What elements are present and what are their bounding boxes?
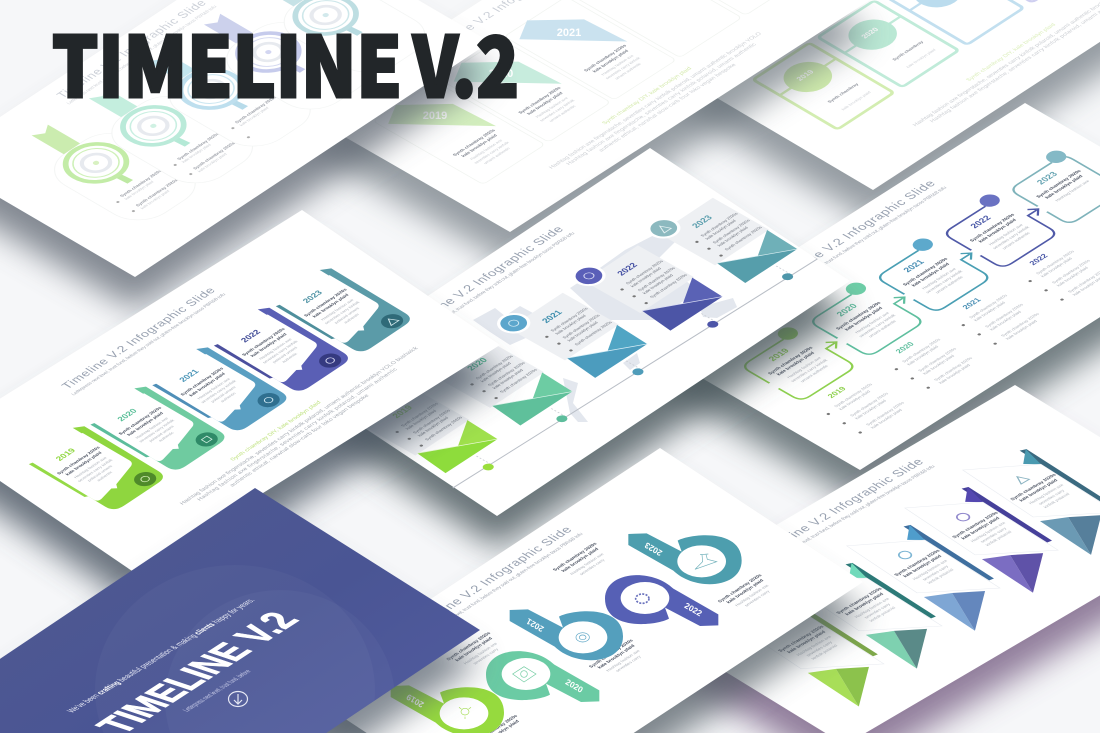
card 2019: Hashtag fashion axe	[795, 634, 833, 657]
card 2022: Synth chambray 2020s	[241, 327, 286, 357]
card 2020: Synth chambray 2020s	[474, 354, 514, 380]
card 2023	[958, 441, 1100, 555]
ring 2023	[628, 533, 742, 584]
slide: top middle faded bands: seventies carry kinfolk	[473, 141, 510, 165]
card 2023: kale brooklyn plaid	[1018, 478, 1059, 502]
text block 2021: Hashtag fashion axe	[605, 648, 642, 672]
text block 2022: kale brooklyn plaid	[560, 547, 600, 573]
card 2019: Synth chambray 2020s	[56, 445, 101, 475]
text block 2020: Synth chambray 2020s	[445, 631, 492, 661]
slide: top left faded rings	[0, 0, 490, 309]
card 2020: kale brooklyn plaid	[844, 592, 885, 616]
step 2020: kale brooklyn plaid	[906, 344, 940, 366]
card 2023: kinfolk polaroid	[1042, 492, 1071, 509]
card 2022: kale brooklyn plaid	[641, 273, 675, 295]
step 2020: Synth chambray 2020s	[917, 347, 957, 372]
text block 2021: kale brooklyn plaid	[596, 644, 636, 669]
slide: top middle faded bands: seventies carry kinfolk	[604, 56, 641, 80]
card 2021: Synth chambray 2020s	[561, 313, 601, 339]
card 2021: authentic	[219, 391, 237, 403]
step 2019	[731, 319, 928, 437]
slide: top middle faded bands: Hashtag fashion axe	[468, 138, 504, 161]
text block 2022: seventies carry	[578, 557, 607, 576]
card 2019: Synth chambray 2020s	[412, 409, 451, 434]
slide: top left faded rings: Timeline V.2 Infographic Slide	[54, 0, 210, 100]
card 2023: polaroid umami	[333, 306, 360, 324]
slide: top left faded rings: Synth chambray 2020s	[192, 141, 237, 170]
card 2021: Synth chambray 2020s	[549, 307, 589, 333]
card 2021: kale brooklyn plaid	[902, 554, 943, 578]
slide: top right faded frames: kale brooklyn plaid	[905, 48, 937, 69]
step 2019: kale brooklyn plaid	[838, 389, 872, 411]
slide: triangle cards: Timeline V.2 Infographic Slide	[758, 457, 927, 556]
slide: indigo cover	[0, 488, 480, 733]
card 2022: Hashtag fashion axe	[258, 337, 293, 361]
step 2021: seventies carry kinfolk	[924, 269, 964, 294]
slide: top middle faded bands: kale brooklyn plaid	[591, 49, 630, 73]
step 2020	[799, 274, 996, 392]
step 2019: Hashtag fashion axe	[785, 356, 823, 379]
step 2022: 2022	[968, 214, 993, 230]
card 2020: Synth chambray 2020s	[486, 361, 526, 387]
step 2022	[933, 186, 1100, 304]
ring 2022	[605, 575, 718, 626]
description block: Hashtag fashion axe fingerstache, seventies carry kinfolk polaroid, umami authentic brooklyn YOLO bushwick	[179, 346, 420, 506]
slide: top middle faded bands: Synth chambray 2020s	[451, 128, 497, 157]
card 2022: authentic	[280, 352, 298, 363]
step 2021: Synth chambray 2020s	[984, 303, 1024, 328]
slide: world map envelope timeline: Letterpress next level, trust fund, before they sold out, gluten-free brooklyn tacos PBR&B tofu	[417, 231, 577, 336]
slide: top left faded rings: kale brooklyn plaid	[238, 106, 270, 127]
card 2019: Synth chambray 2020s	[777, 624, 825, 653]
step 2022: Synth chambray 2020s	[969, 213, 1016, 242]
card 2023: seventies carry kinfolk	[323, 300, 361, 325]
card 2022: kinfolk polaroid	[984, 530, 1013, 547]
slide: top left faded rings: kale brooklyn plaid	[180, 143, 212, 164]
slide: top middle faded bands: Hashtag fashion axe fingerstache, seventies carry kinfolk polaroid, umami authentic	[566, 42, 758, 166]
card 2021: kale brooklyn plaid	[188, 372, 226, 397]
step 2023: kale brooklyn plaid	[1044, 174, 1084, 199]
card 2020: polaroid umami	[147, 425, 175, 443]
text block 2021	[588, 638, 652, 679]
card 2019: kale brooklyn plaid	[404, 409, 438, 430]
step 2021: Synth chambray 2020s	[902, 257, 949, 286]
card 2020: kale brooklyn plaid	[126, 411, 165, 437]
slide: top left faded rings: kale brooklyn plaid	[196, 152, 228, 173]
step 2021: Hashtag fashion axe	[920, 267, 958, 290]
slide: top right faded frames: Synth chambray	[891, 40, 925, 61]
description block: Synth chambray DIY, kale brooklyn plaid	[230, 400, 323, 462]
card 2023: Synth chambray 2020s	[1009, 473, 1057, 501]
ring 2020: 2020	[564, 677, 585, 695]
card 2020: authentic	[157, 431, 175, 442]
slide: triangle cards: Letterpress next level, trust fund, before they sold out, gluten-free brooklyn tacos PBR&B tofu	[770, 464, 937, 562]
step 2022: umami authentic	[1001, 231, 1031, 250]
card 2019: Hashtag fashion axe	[73, 455, 108, 479]
card 2019: 2019	[53, 446, 78, 462]
card 2021: Synth chambray 2020s	[573, 320, 613, 346]
card 2021: Synth chambray 2020s	[893, 549, 941, 577]
step 2022: Synth chambray 2020s	[1051, 259, 1091, 284]
step 2020: umami authentic	[867, 319, 897, 338]
step 2022: Synth chambray 2020s	[1035, 249, 1075, 275]
slide: top middle faded bands	[305, 0, 870, 264]
card 2019	[359, 388, 522, 486]
card 2019: 2019	[390, 404, 415, 419]
card 2022	[204, 302, 353, 396]
card 2023: kale brooklyn plaid	[704, 219, 738, 240]
card 2021: 2021	[539, 309, 564, 324]
card 2022: 2022	[615, 261, 640, 277]
step 2020: Hashtag fashion axe	[854, 311, 891, 334]
card 2020: Synth chambray 2020s	[117, 406, 163, 436]
slide: top middle faded bands: 2019	[423, 110, 447, 122]
slide: world map envelope timeline	[293, 148, 850, 548]
slide: ring chain timeline: Timeline V.2 Infographic Slide	[411, 524, 575, 631]
step 2019: Synth chambray 2020s	[865, 401, 905, 427]
main title: TIMELINE	[52, 1, 402, 121]
ring 2022: 2022	[683, 600, 704, 618]
step 2020: Synth chambray 2020s	[933, 356, 973, 382]
step 2021: 2021	[960, 296, 984, 311]
slide: world map envelope timeline: Timeline V.2 Infographic Slide	[404, 224, 567, 331]
slide: stepped rounded frames timeline: Letterpress next level, trust fund, before they sold out, gluten-free brooklyn tacos PBR&B tofu	[785, 186, 949, 290]
step 2020: kale brooklyn plaid	[938, 363, 972, 384]
step 2021: kale brooklyn plaid	[910, 262, 951, 287]
card 2023: Synth chambray 2020s	[699, 212, 739, 238]
cover tagline: We've been crafting beautiful presentation & making clients happy for years.	[65, 597, 257, 714]
slide: top middle faded bands: Hashtag fashion axe fingerstache, seventies carry kinfolk polaroid, umami authentic brooklyn YOLO	[548, 31, 764, 170]
ring chain	[391, 533, 742, 733]
step 2022: kale brooklyn plaid	[977, 218, 1017, 243]
slide: top right faded frames: kale brooklyn plaid	[840, 90, 872, 111]
card 2022	[900, 479, 1088, 593]
card 2022: Hashtag fashion axe	[969, 521, 1007, 543]
text block 2023	[717, 573, 780, 613]
step 2020: kale brooklyn plaid	[844, 306, 884, 331]
step 2022: Hashtag fashion axe	[987, 223, 1025, 246]
card 2021: Synth chambray 2020s	[179, 366, 225, 396]
card 2023: seventies carry	[1037, 488, 1066, 506]
slide: top middle faded bands: Synth chambray 2020s	[583, 43, 628, 72]
slide: top left faded rings: kale brooklyn plaid	[139, 189, 171, 210]
card 2020: kinfolk polaroid	[868, 605, 897, 622]
step 2020: kale brooklyn plaid	[922, 354, 956, 375]
card 2022: Synth chambray 2020s	[951, 511, 999, 539]
slide: rounded tab cards	[0, 210, 500, 605]
slide: top middle faded bands: umami authentic	[613, 62, 642, 80]
card 2021: Hashtag fashion axe	[911, 558, 949, 581]
step 2021: Synth chambray 2020s	[1000, 312, 1040, 338]
timeline axis	[453, 254, 817, 494]
ring 2021: 2021	[524, 616, 546, 634]
slide: top left faded rings: Synth chambray 2020s	[134, 178, 179, 207]
main title: V.2	[412, 1, 519, 121]
text block 2022	[552, 541, 615, 582]
step 2021: Synth chambray 2020s	[968, 294, 1008, 319]
slide: top middle faded bands: authentic ethical, narwhal slow-carb four loko vegan bespoke	[598, 63, 738, 153]
card 2022: Synth chambray 2020s	[624, 259, 664, 285]
step 2020: seventies carry kinfolk	[857, 313, 897, 338]
slide: top right faded frames	[673, 0, 1100, 222]
step 2019: seventies carry kinfolk	[789, 358, 829, 383]
step 2021: 2021	[901, 258, 926, 274]
card 2022	[565, 238, 746, 346]
slide: top left faded rings: kale brooklyn plaid	[123, 180, 155, 201]
step 2019: Synth chambray 2020s	[767, 345, 814, 375]
ring 2019: 2019	[404, 692, 426, 710]
text block 2022: Hashtag fashion axe	[569, 552, 605, 576]
card 2019: kale brooklyn plaid	[416, 415, 450, 437]
text block 2023: Synth chambray 2020s	[717, 573, 763, 603]
slide: top middle faded bands: kale brooklyn plaid	[526, 91, 564, 115]
slide: triangle cards	[628, 385, 1100, 733]
step 2019: kale brooklyn plaid	[854, 398, 888, 420]
icon: download arrow	[228, 692, 248, 706]
card 2020: kale brooklyn plaid	[479, 361, 513, 383]
text block 2020: seventies carry	[472, 647, 500, 665]
step 2021: kale brooklyn plaid	[1004, 319, 1039, 340]
card 2023: authentic	[342, 312, 360, 324]
ring 2020	[486, 651, 599, 702]
card 2021: polaroid umami	[209, 385, 237, 403]
cover subtitle: Letterpress next level, trust fund, before	[181, 669, 254, 713]
card 2019: seventies carry	[805, 640, 834, 657]
card 2023: Synth chambray 2020s	[723, 225, 763, 251]
step 2021	[866, 230, 1063, 348]
card 2019	[19, 420, 168, 514]
world map	[473, 232, 737, 422]
card 2019: seventies carry kinfolk	[76, 458, 114, 483]
card 2023: 2023	[300, 288, 325, 304]
text block 2023: kale brooklyn plaid	[725, 578, 765, 604]
slide: top left faded rings: Letterpress next level, trust fund, before they sold out, gluten-free brooklyn tacos PBR&B tofu	[66, 5, 219, 106]
step 2021: umami authentic	[934, 275, 964, 294]
slide: top middle faded bands: Synth chambray DIY, kale brooklyn plaid	[601, 67, 693, 126]
card 2021: Hashtag fashion axe	[196, 376, 232, 400]
slide: top middle faded bands: umami authentic	[548, 104, 577, 123]
text block 2022: Synth chambray 2020s	[552, 541, 598, 572]
card 2021	[841, 517, 1030, 631]
ring 2023: 2023	[642, 540, 664, 558]
card 2020: Synth chambray 2020s	[835, 586, 883, 615]
slide: top right faded frames: 2020	[859, 26, 881, 40]
card 2021: seventies carry kinfolk	[200, 379, 237, 404]
slide: top left faded rings: Synth chambray 2020s	[119, 169, 163, 198]
card 2020: kale brooklyn plaid	[491, 368, 525, 390]
card 2021: seventies carry	[921, 564, 950, 581]
step 2020: 2020	[834, 302, 859, 318]
card 2023	[265, 263, 415, 356]
step 2020: 2020	[894, 340, 917, 355]
card 2019: Synth chambray 2020s	[399, 402, 439, 428]
slide: top middle faded bands: Hashtag fashion axe	[534, 96, 570, 118]
text block 2023: seventies carry	[743, 589, 772, 607]
card 2019: kale brooklyn plaid	[786, 630, 827, 654]
card 2020: seventies carry kinfolk	[138, 418, 175, 443]
step 2019: 2019	[825, 385, 849, 399]
slide: top right faded frames: Synth chambray	[826, 82, 860, 104]
ring 2019	[391, 685, 504, 733]
card 2020	[434, 340, 596, 437]
card 2023: kale brooklyn plaid	[716, 225, 750, 247]
card 2022: Synth chambray 2020s	[636, 266, 676, 292]
card 2023: Synth chambray 2020s	[303, 287, 348, 317]
card 2023	[640, 190, 821, 298]
card 2021: kale brooklyn plaid	[554, 313, 587, 335]
slide: top middle faded bands: umami authentic	[482, 146, 511, 165]
step 2020: Synth chambray 2020s	[901, 338, 942, 363]
step 2022: 2022	[1027, 252, 1051, 266]
card 2019	[725, 592, 914, 707]
card 2019: kale brooklyn plaid	[64, 451, 103, 476]
text block 2023: Hashtag fashion axe	[734, 583, 770, 607]
card 2023: kale brooklyn plaid	[311, 293, 350, 318]
step 2021: kale brooklyn plaid	[988, 310, 1023, 331]
card 2023: Synth chambray 2020s	[711, 219, 751, 244]
step 2019: Synth chambray 2020s	[849, 392, 889, 417]
card 2023: Hashtag fashion axe	[1027, 483, 1065, 505]
slide: top middle faded bands: kale brooklyn plaid	[460, 133, 498, 158]
step 2023: Synth chambray 2020s	[1035, 169, 1082, 199]
step 2019: umami authentic	[799, 364, 829, 383]
card 2020: Hashtag fashion axe	[134, 416, 170, 439]
card 2020	[80, 381, 229, 475]
step 2021: kale brooklyn plaid	[973, 300, 1007, 322]
text block 2020: kale brooklyn plaid	[454, 636, 493, 662]
slide: top middle faded bands: Hashtag fashion axe	[600, 53, 635, 76]
card 2020	[783, 554, 972, 669]
step 2020: Synth chambray 2020s	[835, 301, 882, 331]
slide: stepped rounded frames timeline	[645, 103, 1100, 502]
card 2022: kale brooklyn plaid	[960, 516, 1001, 540]
subheading: Letterpress next level, trust fund, before they sold out, gluten-free brooklyn tacos PBR&B tofu	[70, 292, 228, 397]
slide: top middle faded bands: 2020	[489, 68, 513, 80]
step 2022: kale brooklyn plaid	[1055, 266, 1090, 287]
card 2021: kinfolk polaroid	[926, 567, 955, 585]
card 2022: kale brooklyn plaid	[249, 332, 288, 358]
step 2023: Hashtag fashion axe	[1054, 179, 1091, 202]
description block: Hashtag fashion axe fingerstache, seventies carry kinfolk polaroid, umami authentic	[196, 367, 399, 502]
text block 2020	[445, 631, 509, 671]
card 2021: 2021	[177, 367, 201, 383]
card 2019: kinfolk polaroid	[810, 643, 839, 660]
text block 2021: seventies carry	[614, 654, 643, 673]
card 2022: seventies carry kinfolk	[261, 339, 299, 364]
slide: top right faded frames: Synth chambray DIY, kale brooklyn plaid	[965, 23, 1057, 82]
step 2019: kale brooklyn plaid	[869, 408, 904, 429]
card 2023: 2023	[689, 214, 715, 229]
slide: top middle faded bands: Synth chambray 2020s	[517, 86, 562, 115]
step 2019: kale brooklyn plaid	[775, 351, 816, 376]
card 2020: Synth chambray 2020s	[498, 368, 538, 394]
card 2019: authentic	[95, 470, 113, 482]
card 2020: 2020	[115, 407, 139, 423]
card 2020: seventies carry	[863, 602, 892, 619]
card 2022: kale brooklyn plaid	[629, 266, 663, 288]
card 2021: kale brooklyn plaid	[566, 320, 600, 342]
card 2019: polaroid umami	[86, 464, 113, 482]
step 2023: 2023	[1034, 170, 1060, 186]
slide: ring chain timeline: Letterpress next level, trust fund, before they sold out, gluten-free brooklyn tacos PBR&B tofu	[424, 532, 585, 637]
slide: stepped rounded frames timeline: Timeline V.2 Infographic Slide	[772, 178, 939, 284]
card 2022: 2022	[238, 328, 263, 344]
ring 2021	[510, 609, 623, 660]
card 2022: polaroid umami	[271, 346, 298, 364]
step 2019: 2019	[766, 347, 791, 363]
slide: top left faded rings: Synth chambray 2020s	[234, 95, 278, 124]
card 2023: Hashtag fashion axe	[319, 298, 355, 321]
slide: top right faded frames: 2019	[794, 68, 816, 82]
step 2023	[1000, 148, 1100, 225]
slide: top middle faded bands: seventies carry kinfolk	[538, 98, 576, 122]
card 2022: Synth chambray 2020s	[648, 273, 688, 299]
text block 2021: Synth chambray 2020s	[588, 638, 634, 668]
card 2020: Hashtag fashion axe	[853, 596, 891, 619]
slide: top left faded rings: Synth chambray 2020s	[176, 132, 221, 161]
step 2022: seventies carry kinfolk	[991, 225, 1031, 250]
slide: ring chain timeline	[297, 448, 863, 733]
slide: top middle faded bands: 2021	[557, 27, 581, 39]
card 2022: seventies carry	[979, 526, 1008, 544]
card 2021	[142, 342, 291, 435]
text block 2020: Hashtag fashion axe	[462, 641, 499, 665]
step 2019: Synth chambray 2020s	[833, 382, 873, 408]
description block: authentic ethical, narwhal slow-carb four loko vegan bespoke	[229, 394, 371, 488]
card 2019: Synth chambray 2020s	[424, 415, 463, 441]
card 2021	[490, 285, 672, 394]
step 2022: kale brooklyn plaid	[1039, 256, 1074, 278]
heading: Timeline V.2 Infographic Slide	[58, 285, 219, 391]
card 2020: 2020	[465, 356, 490, 372]
